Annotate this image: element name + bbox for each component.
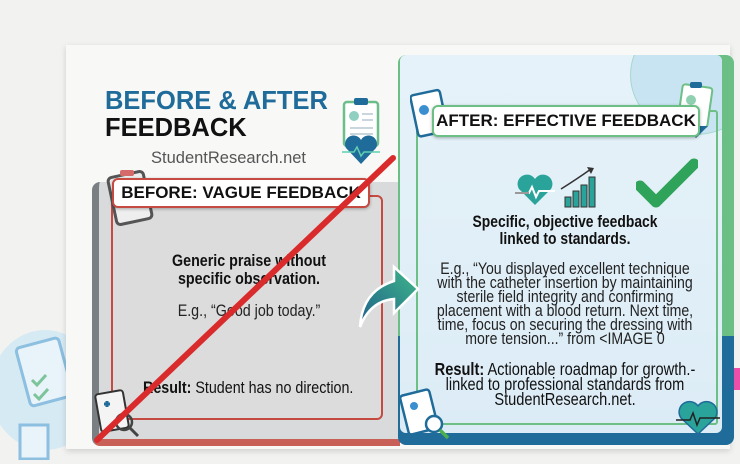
- icon: heart pulse and chart: [515, 167, 596, 208]
- label: before: BEFORE: VAGUE FEEDBACK: [121, 183, 361, 202]
- inner green frame: [416, 110, 718, 425]
- heading: generic praise: specific observation.: [178, 269, 320, 288]
- title: [105, 87, 328, 167]
- arrow: before to after: [358, 264, 420, 328]
- heading: generic praise: Generic praise without: [172, 251, 326, 270]
- result text after: linked to professional standards from: [446, 374, 684, 394]
- title: BEFORE & AFTER: [105, 87, 328, 115]
- main card: [66, 45, 730, 449]
- panel: after: [398, 55, 734, 445]
- heading: specific feedback: linked to standards.: [500, 230, 630, 248]
- panel: before: [92, 182, 400, 446]
- result text: Result: Student has no direction.: [143, 378, 353, 397]
- example text after: time, focus on securing the dressing with: [438, 315, 692, 334]
- label: after: [432, 105, 700, 137]
- title: FEEDBACK: [105, 114, 247, 142]
- title: StudentResearch.net: [151, 149, 306, 167]
- heading: specific feedback: [472, 213, 658, 248]
- icon: clipboard top-right after: [679, 82, 714, 138]
- label: before: [112, 178, 370, 208]
- heading: specific feedback: Specific, objective feedback: [473, 213, 657, 231]
- icon: clipboard top-left after: [410, 88, 444, 138]
- icon: clipboard with heart: [342, 98, 380, 164]
- icon: clipboard magnifier after: [400, 388, 450, 440]
- icon: heart pulse bottom-right: [676, 400, 720, 433]
- example text: E.g., “Good job today.”: [178, 301, 320, 320]
- inner red frame: [111, 195, 383, 420]
- decorative background circle left: [0, 330, 100, 450]
- label: after: AFTER: EFFECTIVE FEEDBACK: [436, 111, 696, 130]
- icon: checkmark: [636, 158, 698, 208]
- decorative pink tab right: [734, 368, 740, 390]
- heading: generic praise: [172, 251, 326, 288]
- icon: background clipboard left: [14, 336, 66, 460]
- example text after: with the catheter insertion by maintaining: [437, 273, 693, 292]
- result text after: [435, 359, 695, 409]
- result text after: Result: Actionable roadmap for growth.-: [435, 359, 695, 379]
- result text after: StudentResearch.net.: [494, 389, 636, 409]
- example text after: sterile field integrity and confirming: [456, 287, 674, 306]
- icon: clipboard magnifier before: [94, 389, 139, 437]
- icon: clipboard top-left before: [106, 170, 154, 226]
- example text after: E.g., “You displayed excellent technique: [440, 259, 690, 278]
- example text after: more tension...” from <IMAGE 0: [465, 329, 665, 348]
- example text after: placement with a blood return. Next time,: [437, 301, 693, 320]
- example text after: [437, 259, 693, 348]
